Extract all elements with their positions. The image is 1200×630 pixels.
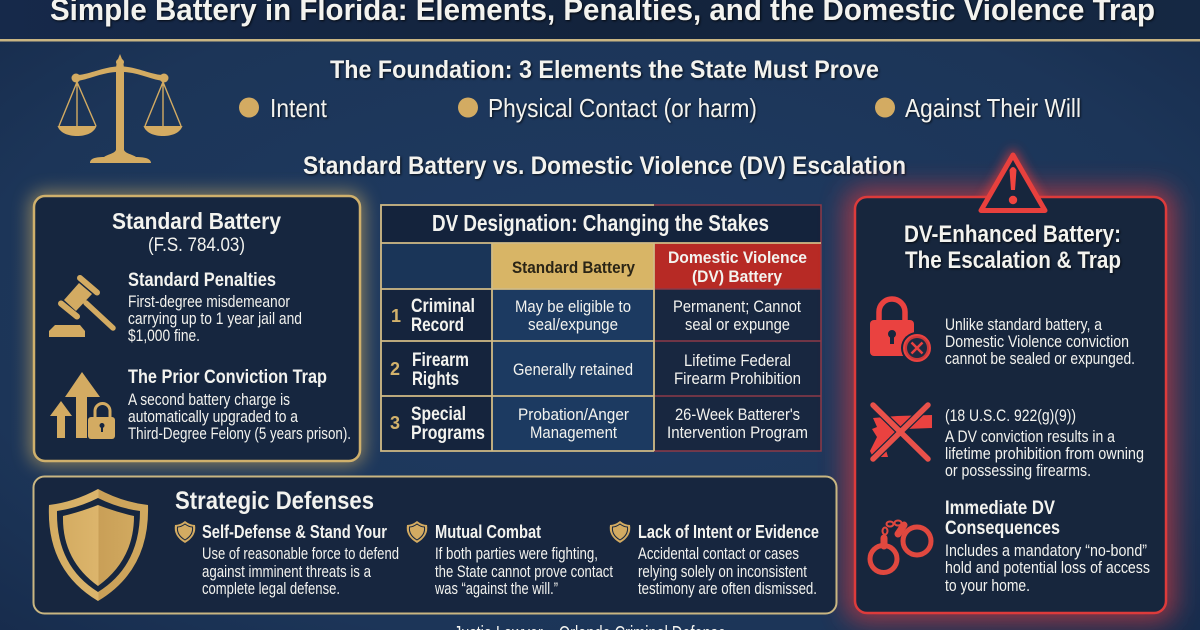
column header: DV: Domestic Violence [668,248,807,267]
text: standard penalties: carrying up to 1 year jail and [128,310,302,328]
text: standard penalties: First-degree misdemeanor [128,293,290,311]
text: prior conviction trap: automatically upgraded to a [128,408,299,426]
column header: DV: (DV) Battery [692,267,782,286]
text: prior conviction trap: Third-Degree Felony (5 years prison). [128,425,351,443]
panel: DV-enhanced battery [846,153,1174,621]
defense: mutual combat: the State cannot prove contact [435,563,613,581]
panel heading: DV-Enhanced Battery: [904,221,1121,248]
column header: DV [668,248,807,286]
row: special programs: 26-Week Batterer's [675,405,800,424]
row: firearm rights: Rights [412,369,459,390]
icon: warning triangle [981,155,1045,210]
panel heading [904,221,1121,274]
row: special programs: Special [411,404,466,425]
text: immediate consequences: Includes a mandatory “no-bond” [945,542,1147,560]
row: criminal record [391,296,801,336]
defense: lack of intent: testimony are often dismissed. [638,580,817,598]
icon: scales of justice [58,54,182,163]
text: cannot be sealed: Domestic Violence conviction [945,333,1129,351]
defense: self-defense: Self-Defense & Stand Your [202,522,387,542]
text: firearm prohibition: lifetime prohibition from owning [945,445,1144,463]
defense: mutual combat [407,521,613,598]
text: firearm prohibition: or possessing firearms. [945,462,1091,480]
row: firearm rights: 2 [390,359,400,379]
row: special programs: 3 [390,413,400,433]
row: special programs: Probation/Anger [518,405,629,424]
row: special programs: Programs [411,423,485,444]
panel heading: Strategic Defenses [175,487,374,515]
text: cannot be sealed: cannot be sealed or expunged. [945,350,1135,368]
defense: self-defense [175,521,399,598]
text: firearm prohibition [945,407,1144,480]
text: immediate consequences: Immediate DV [945,498,1055,519]
element: intent: Intent [270,93,328,123]
icon: large shield [49,489,148,601]
row: criminal record: seal or expunge [685,315,790,334]
row: firearm rights: Firearm Prohibition [674,369,801,388]
defense: self-defense: against imminent threats is a [202,563,372,581]
icon: handcuffs [870,520,931,572]
row: firearm rights: Generally retained [513,360,633,379]
defense: lack of intent: relying solely on inconsistent [638,563,807,581]
defense: self-defense: Use of reasonable force to defend [202,545,399,563]
text: prior conviction trap [128,367,351,443]
text: immediate consequences [945,498,1150,595]
defense: mutual combat: was “against the will.” [434,580,558,598]
icon: rising arrows and lock [50,372,115,439]
element: intent [239,93,328,123]
column header: standard: Standard Battery [512,258,635,277]
text: cannot be sealed: Unlike standard battery, a [945,316,1103,334]
element: against their will: Against Their Will [905,93,1081,123]
row: criminal record: 1 [391,306,401,326]
element: physical contact: Physical Contact (or harm) [488,93,757,123]
header band [0,0,1200,42]
row: firearm rights: Firearm [412,350,469,371]
text: cannot be sealed [945,316,1135,368]
defense: lack of intent: Accidental contact or cases [638,545,799,563]
panel: standard battery [30,192,364,465]
table title: DV Designation: Changing the Stakes [432,210,769,236]
text: firearm prohibition: (18 U.S.C. 922(g)(9)) [945,407,1076,425]
text: immediate consequences: to your home. [945,577,1030,595]
text: standard penalties [128,270,302,345]
defense: mutual combat: If both parties were fighting, [435,545,598,563]
row: special programs: Management [530,423,617,442]
text: standard penalties: Standard Penalties [128,270,276,291]
heading: comparison: Standard Battery vs. Domestic Violence (DV) Escalation [303,152,906,180]
row: special programs: Intervention Program [667,423,808,442]
section: foundation elements [239,56,1081,123]
row: special programs [390,404,808,444]
defense: lack of intent [610,521,819,598]
panel: strategic defenses [34,476,836,614]
row: criminal record: Permanent; Cannot [673,297,801,316]
icon: gavel [49,278,113,337]
text: prior conviction trap: The Prior Conviction Trap [128,367,327,388]
panel heading: The Escalation & Trap [905,247,1121,274]
heading: foundation: The Foundation: 3 Elements the State Must Prove [330,56,879,84]
text: standard penalties: $1,000 fine. [128,327,200,345]
text: firearm prohibition: A DV conviction results in a [945,428,1116,446]
icon: crossed out firearm [870,405,932,459]
row: firearm rights: Lifetime Federal [684,351,791,370]
text: immediate consequences: Consequences [945,518,1060,539]
icon: lock with x [870,299,933,364]
row: criminal record: Criminal [411,296,475,317]
text: prior conviction trap: A second battery charge is [128,391,290,409]
table: DV designation [381,205,821,451]
defense: mutual combat: Mutual Combat [435,522,541,542]
defense: lack of intent: Lack of Intent or Evidence [638,522,819,542]
row: firearm rights [390,350,801,390]
row: criminal record: May be eligible to [515,297,631,316]
text: immediate consequences: hold and potential loss of access [945,559,1150,577]
defense: self-defense: complete legal defense. [202,580,340,598]
statute reference: (F.S. 784.03) [148,235,245,256]
row: criminal record: seal/expunge [528,315,618,334]
row: criminal record: Record [411,315,464,336]
panel heading: Standard Battery [112,208,281,234]
